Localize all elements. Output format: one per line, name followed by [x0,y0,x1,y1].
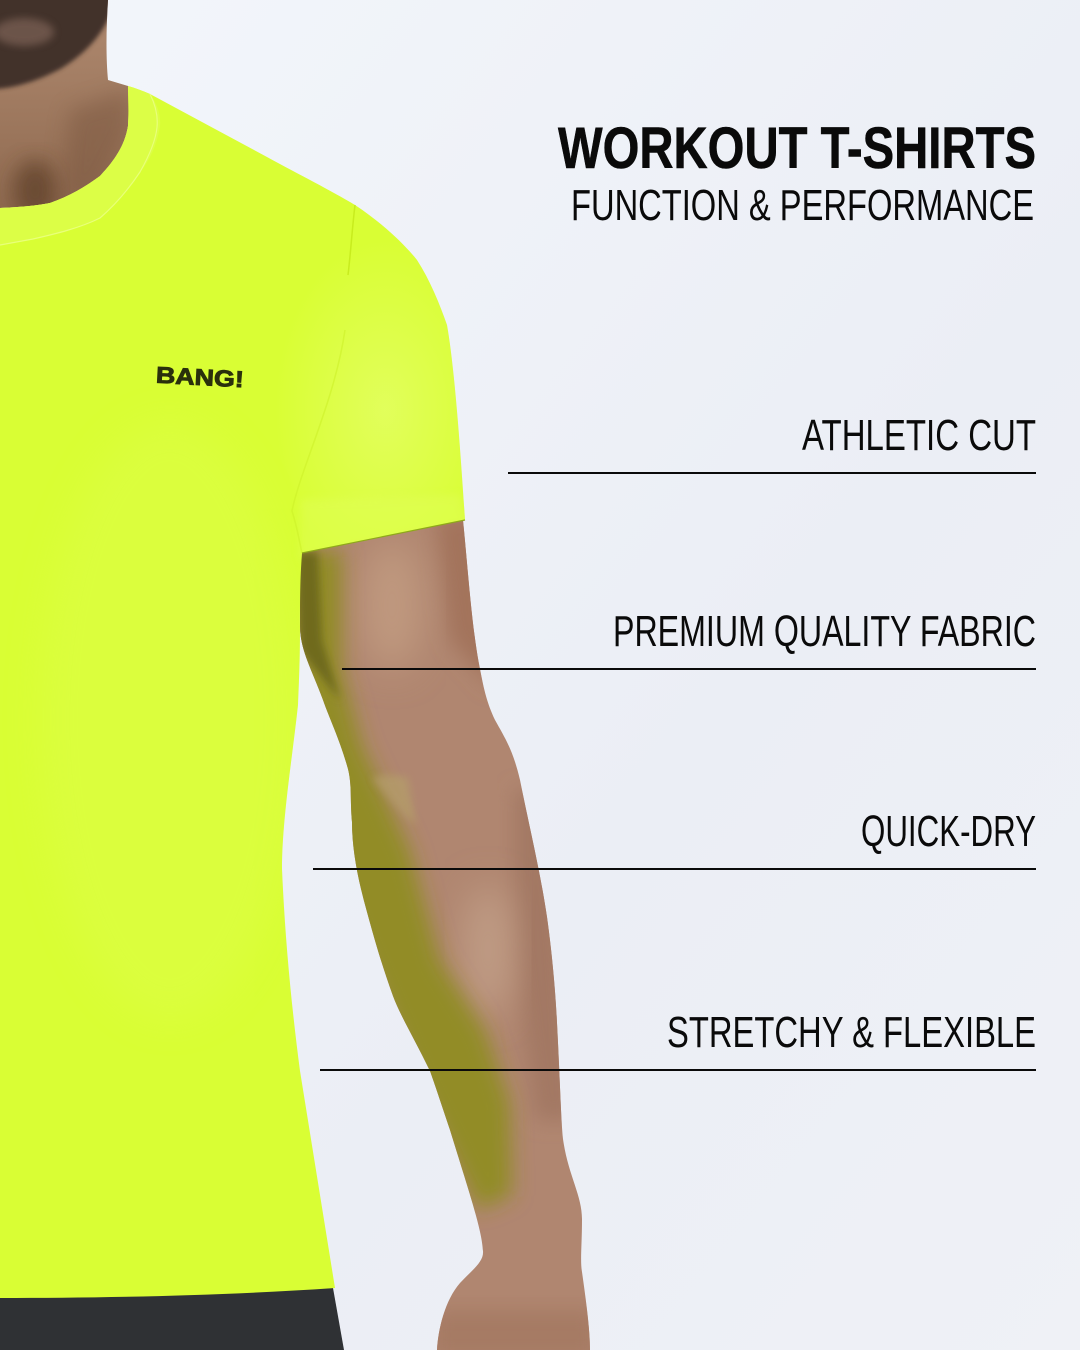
highlights [362,540,422,670]
shorts [0,1288,344,1350]
sleeve seam [348,205,355,275]
arm [290,515,600,1350]
heading [558,116,1036,230]
olive reflection from the shirt [290,550,512,1210]
hand shading [430,1310,600,1350]
sleeve hem edge [302,520,465,553]
model photo [0,0,600,1350]
warm right side [434,521,483,684]
neck and chin [0,0,130,220]
collar band [0,86,160,245]
logo: BANG! [155,362,245,392]
neon yellow t-shirt [0,86,495,1298]
